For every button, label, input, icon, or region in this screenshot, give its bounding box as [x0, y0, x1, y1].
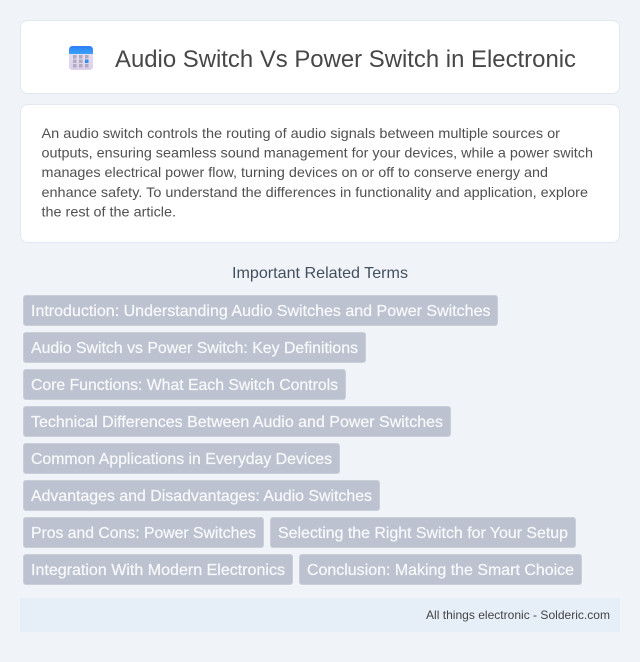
tag: introduction: Introduction: Understanding Audio Switches and Power Switches [31, 303, 491, 320]
tag: technical differences: Technical Differences Between Audio and Power Switches [31, 414, 443, 431]
panel: intro paragraph: An audio switch controls the routing of audio signals between multiple sources or [42, 125, 560, 141]
tag: integration [24, 554, 292, 584]
panel: intro paragraph: enhance safety. To understand the differences in functionality and application, explore [42, 184, 588, 200]
tag: key definitions: Audio Switch vs Power Switch: Key Definitions [31, 340, 358, 357]
footer [20, 598, 620, 632]
tag: common applications [24, 444, 340, 474]
panel: intro paragraph [20, 104, 620, 242]
tag: selecting the right switch [270, 518, 576, 548]
footer: All things electronic - Solderic.com [426, 608, 610, 622]
heading: important related terms: Important Related Terms [232, 265, 408, 282]
panel: intro paragraph: manages electrical power flow, turning devices on or off to conserve energy and [42, 164, 548, 180]
tag: conclusion: Conclusion: Making the Smart Choice [307, 562, 574, 579]
title panel [20, 20, 620, 94]
tag: introduction [24, 296, 498, 326]
tag: key definitions [24, 332, 366, 362]
tag: common applications: Common Applications in Everyday Devices [31, 451, 332, 468]
tag: core functions [24, 370, 346, 400]
panel: intro paragraph: outputs, ensuring seamless sound management for your devices, while a power switch [42, 145, 593, 161]
tag: core functions: Core Functions: What Each Switch Controls [31, 377, 338, 394]
tag: pros and cons [24, 518, 264, 548]
tag: pros and cons: Pros and Cons: Power Switches [31, 525, 256, 542]
tag: integration: Integration With Modern Electronics [31, 562, 285, 579]
tag: advantages [24, 480, 380, 510]
tag: conclusion [300, 554, 582, 584]
tag: technical differences [24, 406, 450, 436]
related term tags [24, 296, 582, 584]
tag: advantages: Advantages and Disadvantages: Audio Switches [31, 488, 372, 505]
icon: calendar grid [69, 46, 93, 70]
title: Audio Switch Vs Power Switch in Electronic [115, 46, 576, 73]
panel: intro paragraph: the rest of the article. [42, 203, 176, 219]
tag: selecting the right switch: Selecting the Right Switch for Your Setup [278, 525, 568, 542]
